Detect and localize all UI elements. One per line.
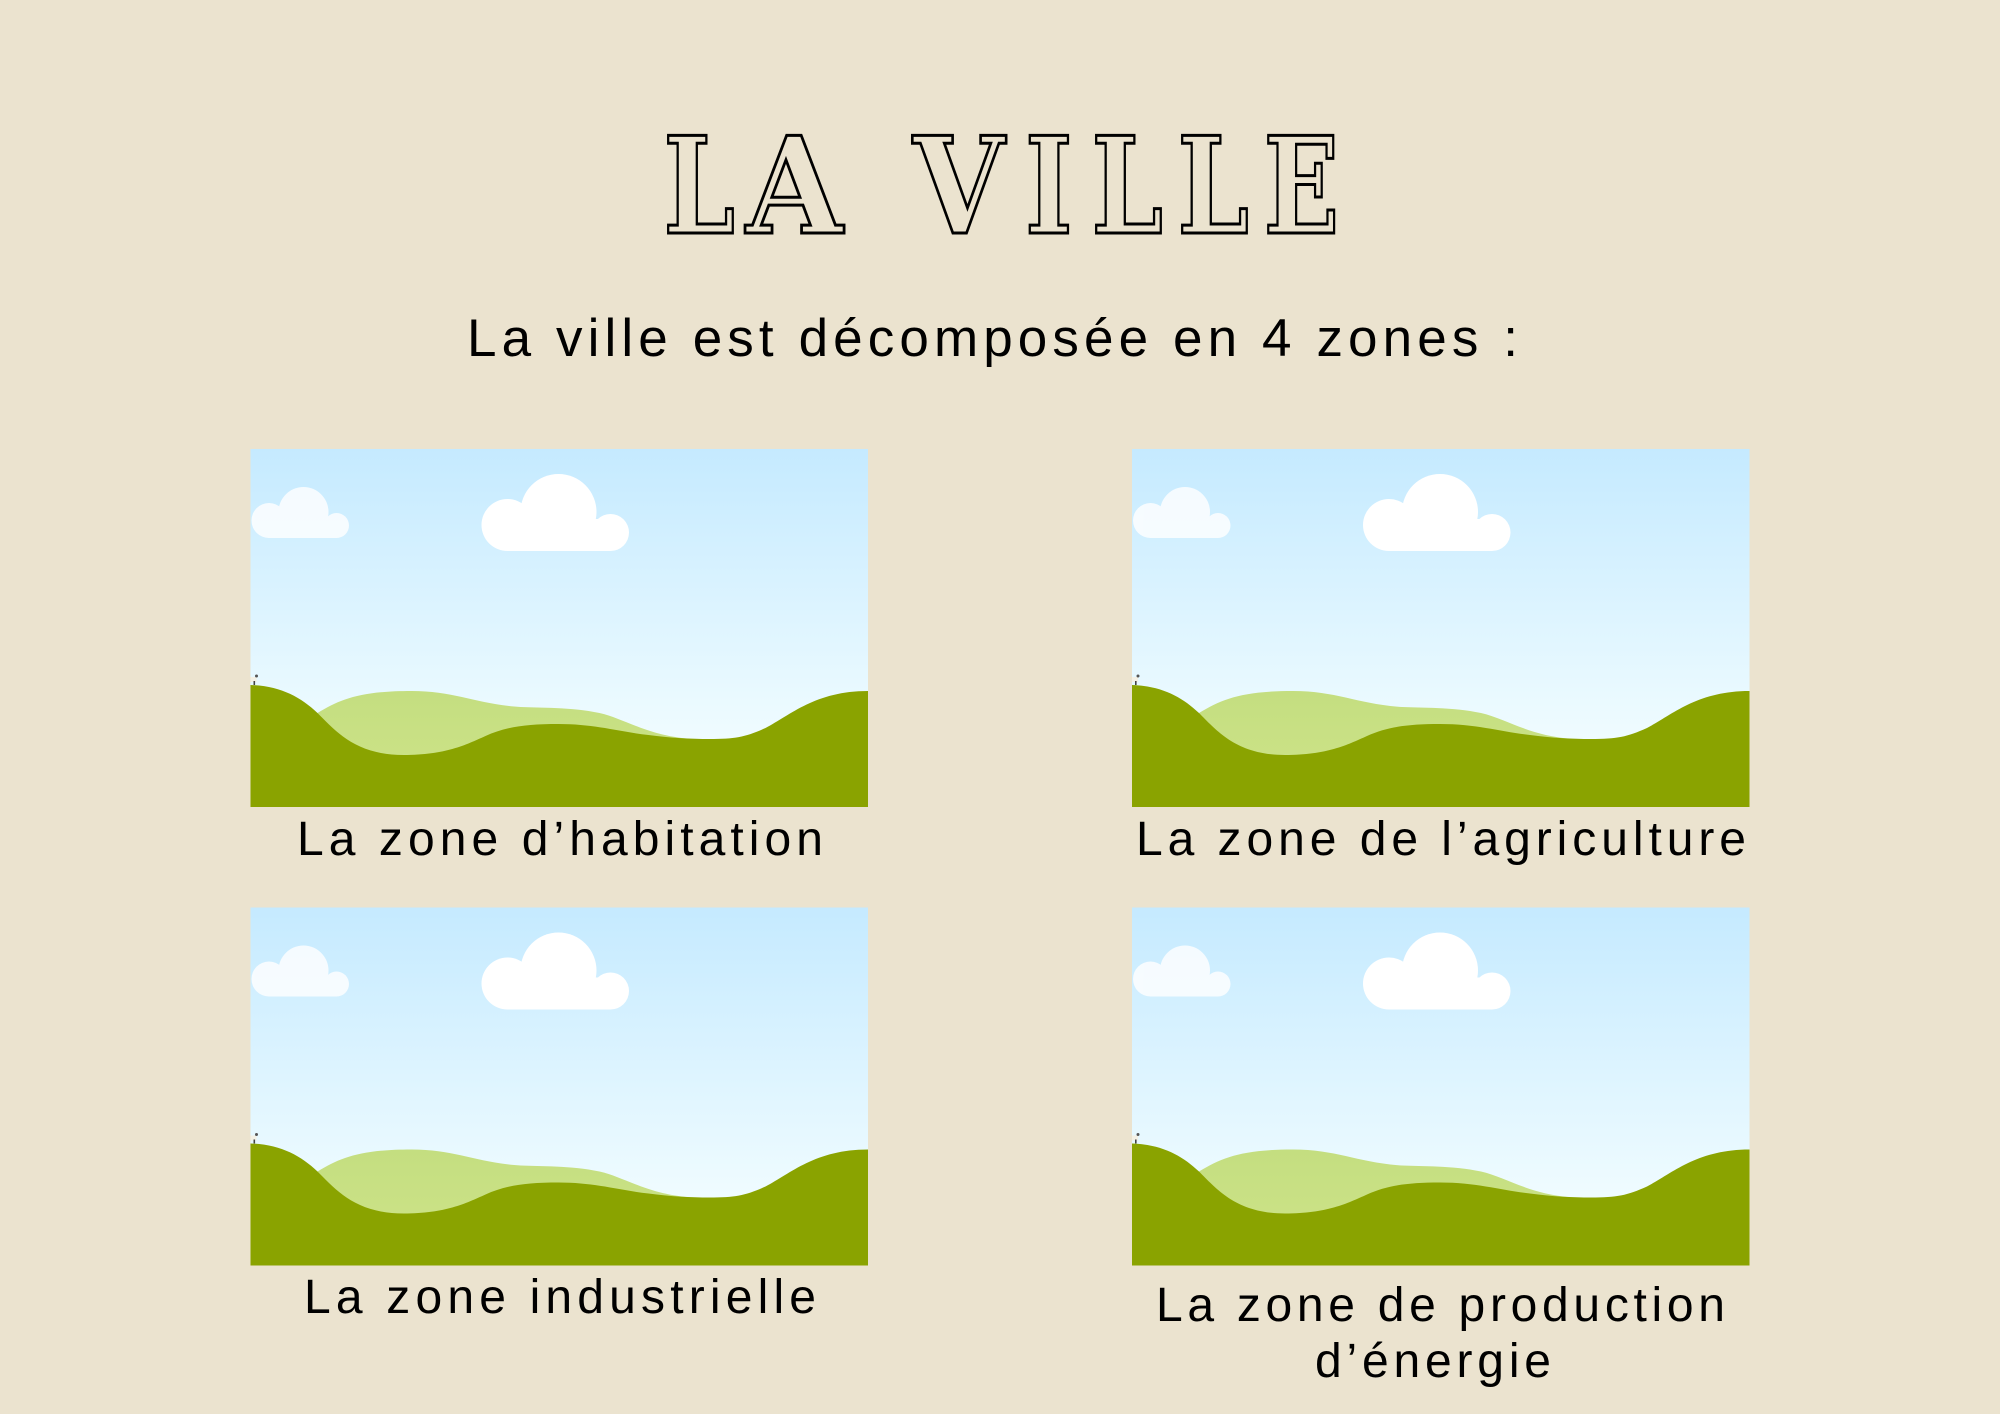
label: habitation: La zone d’habitation <box>297 813 823 866</box>
label: production d'energie: La zone de production <box>1156 1279 1725 1332</box>
hill: dark <box>250 1144 868 1266</box>
icon: sheep <box>250 674 258 685</box>
title: V <box>912 107 1006 265</box>
cloud: large <box>1363 932 1510 1010</box>
label: agriculture: La zone de l’agriculture <box>1136 813 1746 866</box>
cloud: small <box>1133 946 1230 996</box>
hill: light <box>318 1150 690 1242</box>
icon: sheep <box>250 1133 258 1144</box>
panel: zone de production d'energie <box>1132 908 1750 1266</box>
title <box>663 107 1339 266</box>
title: E <box>1264 107 1339 265</box>
label: production d'energie <box>1156 1279 1725 1388</box>
icon: sheep <box>1132 1133 1140 1144</box>
sky <box>1132 908 1750 1266</box>
panel: zone de l'agriculture <box>1132 449 1750 807</box>
sky <box>250 449 868 807</box>
cloud: small <box>1133 487 1230 538</box>
hill: dark <box>250 685 868 807</box>
label: industrielle: La zone industrielle <box>304 1271 816 1324</box>
hill: light <box>1199 1150 1572 1242</box>
cloud: small <box>252 946 349 996</box>
sky <box>250 908 868 1266</box>
icon: sheep <box>1132 674 1140 685</box>
hill: light <box>318 691 690 784</box>
title: L <box>1091 108 1163 266</box>
panel: zone d'habitation <box>250 449 868 807</box>
hill: dark <box>1132 685 1750 807</box>
cloud: large <box>482 932 629 1010</box>
subtitle: La ville est décomposée en 4 zones : <box>467 309 1518 368</box>
sky <box>1132 449 1750 807</box>
hill: light <box>1199 691 1572 784</box>
cloud: small <box>252 487 349 538</box>
cloud: large <box>482 474 629 551</box>
title: A <box>744 108 844 265</box>
label: production d'energie: d’énergie <box>1315 1335 1551 1388</box>
cloud: large <box>1363 474 1510 551</box>
panel: zone industrielle <box>250 908 868 1266</box>
hill: dark <box>1132 1144 1750 1266</box>
title: L <box>1177 108 1249 266</box>
title: L <box>663 108 735 266</box>
title: I <box>1025 108 1073 266</box>
